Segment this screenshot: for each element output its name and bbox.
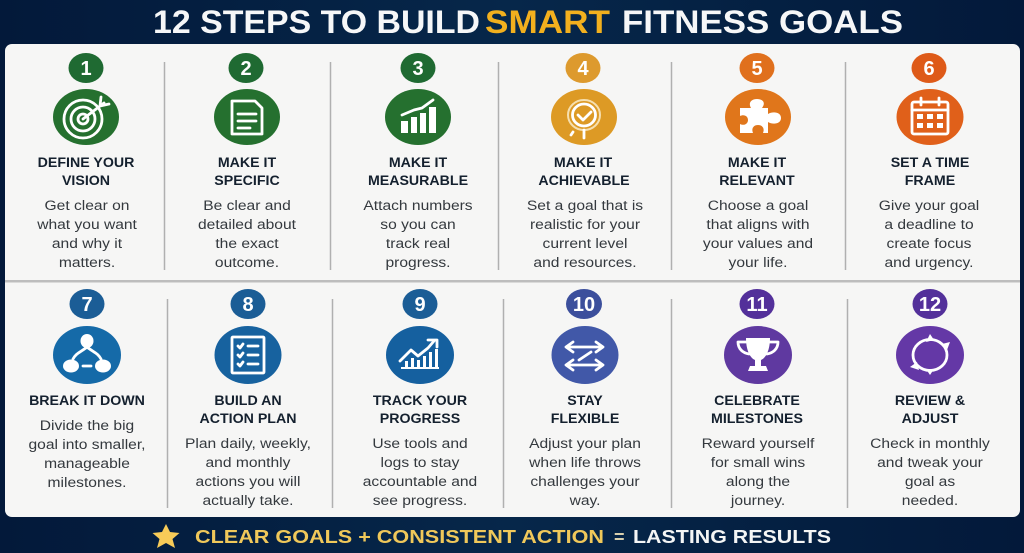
- title: SMART: [485, 4, 610, 40]
- icon: calendar: [896, 89, 964, 145]
- step 10: stay flexible: Adjust your plan: [529, 437, 641, 452]
- step 5: make it relevant: your life.: [729, 256, 787, 271]
- step 2: make it specific: detailed about: [198, 218, 296, 233]
- title: [153, 4, 903, 40]
- step 8: build an action plan: 8: [242, 294, 254, 316]
- step 9: track your progress: Use tools and: [372, 437, 468, 452]
- step 9: track your progress: 9: [414, 294, 426, 316]
- icon: star: [152, 524, 180, 548]
- icon: document: [214, 89, 280, 145]
- step 2: make it specific: outcome.: [215, 256, 279, 271]
- step 11: celebrate milestones: 11: [746, 294, 768, 316]
- step 1: define your vision: 1: [80, 58, 92, 80]
- step 4: make it achievable: realistic for your: [530, 218, 640, 233]
- step 1: define your vision: DEFINE YOUR: [38, 155, 134, 171]
- step 7: break it down: manageable: [44, 457, 130, 472]
- step 8: build an action plan: [185, 289, 311, 509]
- step 8: build an action plan: actually take.: [202, 494, 294, 509]
- icon: trophy: [724, 326, 792, 384]
- step 8: build an action plan: actions you will: [196, 475, 300, 490]
- step 8: build an action plan: BUILD AN: [214, 393, 282, 409]
- step 4: make it achievable: current level: [543, 237, 627, 252]
- step 6: set a time frame: create focus: [887, 237, 971, 252]
- step 3: make it measurable: track real: [386, 237, 450, 252]
- step 2: make it specific: 2: [240, 58, 252, 80]
- step 11: celebrate milestones: [702, 289, 815, 509]
- step 2: make it specific: Be clear and: [203, 199, 291, 214]
- step 4: make it achievable: and resources.: [533, 256, 637, 271]
- title: FITNESS GOALS: [622, 4, 903, 40]
- step 6: set a time frame: FRAME: [905, 173, 955, 189]
- icon: trend chart: [386, 326, 454, 384]
- step 8: build an action plan: and monthly: [205, 456, 291, 471]
- step 4: make it achievable: [527, 53, 643, 271]
- step 4: make it achievable: MAKE IT: [554, 155, 612, 171]
- step 7: break it down: Divide the big: [40, 419, 134, 434]
- step 10: stay flexible: way.: [569, 494, 601, 509]
- step 3: make it measurable: MEASURABLE: [368, 173, 468, 189]
- step 10: stay flexible: challenges your: [530, 475, 640, 490]
- icon: check badge: [551, 89, 617, 145]
- icon: target: [53, 89, 119, 145]
- step 1: define your vision: [36, 53, 137, 271]
- step 7: break it down: milestones.: [48, 476, 126, 491]
- icon: rising bars: [385, 89, 451, 145]
- step 2: make it specific: the exact: [215, 237, 279, 252]
- step 9: track your progress: [363, 289, 477, 509]
- step 1: define your vision: matters.: [59, 256, 115, 271]
- step 4: make it achievable: Set a goal that is: [527, 199, 643, 214]
- footer banner: =: [614, 527, 625, 547]
- step 7: break it down: [28, 289, 146, 491]
- step 11: celebrate milestones: along the: [726, 475, 790, 490]
- step 5: make it relevant: your values and: [703, 237, 813, 252]
- icon: review cycle: [896, 326, 964, 384]
- step 9: track your progress: TRACK YOUR: [373, 393, 467, 409]
- step 10: stay flexible: STAY: [567, 393, 603, 409]
- step 8: build an action plan: ACTION PLAN: [200, 411, 296, 427]
- step 10: stay flexible: FLEXIBLE: [551, 411, 619, 427]
- step 7: break it down: goal into smaller,: [28, 438, 146, 453]
- step 9: track your progress: see progress.: [373, 494, 467, 509]
- step 3: make it measurable: progress.: [385, 256, 451, 271]
- step 11: celebrate milestones: MILESTONES: [711, 411, 803, 427]
- step 12: review and adjust: ADJUST: [902, 411, 959, 427]
- step 8: build an action plan: Plan daily, weekly,: [185, 437, 311, 452]
- step 6: set a time frame: 6: [923, 58, 935, 80]
- step 12: review and adjust: 12: [919, 294, 941, 316]
- icon: puzzle piece: [725, 89, 791, 145]
- footer banner: [152, 524, 831, 548]
- step 4: make it achievable: ACHIEVABLE: [538, 173, 630, 189]
- step 2: make it specific: [198, 53, 296, 271]
- step 11: celebrate milestones: Reward yourself: [702, 437, 815, 452]
- step 11: celebrate milestones: for small wins: [711, 456, 805, 471]
- step 6: set a time frame: Give your goal: [879, 199, 979, 214]
- step 1: define your vision: and why it: [52, 237, 122, 252]
- icon: connected nodes: [53, 326, 121, 384]
- step 12: review and adjust: and tweak your: [877, 456, 983, 471]
- step 9: track your progress: PROGRESS: [380, 411, 460, 427]
- step 1: define your vision: what you want: [36, 218, 137, 233]
- step 12: review and adjust: goal as: [905, 475, 955, 490]
- step 2: make it specific: SPECIFIC: [214, 173, 280, 189]
- step 12: review and adjust: [870, 289, 990, 509]
- step 10: stay flexible: when life throws: [528, 456, 641, 471]
- step 6: set a time frame: SET A TIME: [891, 155, 969, 171]
- step 5: make it relevant: RELEVANT: [719, 173, 795, 189]
- step 9: track your progress: accountable and: [363, 475, 477, 490]
- step 11: celebrate milestones: journey.: [730, 494, 785, 509]
- title: 12 STEPS TO BUILD: [153, 4, 480, 40]
- step 3: make it measurable: 3: [412, 58, 424, 80]
- step 1: define your vision: Get clear on: [45, 199, 129, 214]
- step 4: make it achievable: 4: [577, 58, 589, 80]
- step 12: review and adjust: needed.: [902, 494, 958, 509]
- step 2: make it specific: MAKE IT: [218, 155, 276, 171]
- step 3: make it measurable: [363, 53, 473, 271]
- icon: checklist: [214, 326, 282, 384]
- step 7: break it down: BREAK IT DOWN: [29, 393, 145, 409]
- step 6: set a time frame: [879, 53, 979, 271]
- footer banner: CLEAR GOALS + CONSISTENT ACTION: [195, 527, 604, 547]
- step 5: make it relevant: Choose a goal: [708, 199, 808, 214]
- step 5: make it relevant: [703, 53, 813, 271]
- step 5: make it relevant: 5: [751, 58, 763, 80]
- step 11: celebrate milestones: CELEBRATE: [714, 393, 800, 409]
- step 1: define your vision: VISION: [62, 173, 110, 189]
- step 7: break it down: 7: [81, 294, 93, 316]
- step 6: set a time frame: a deadline to: [884, 218, 974, 233]
- step 6: set a time frame: and urgency.: [884, 256, 974, 271]
- step 9: track your progress: logs to stay: [381, 456, 460, 471]
- step 12: review and adjust: REVIEW &: [895, 393, 965, 409]
- step 5: make it relevant: that aligns with: [706, 218, 810, 233]
- step 5: make it relevant: MAKE IT: [728, 155, 786, 171]
- step 3: make it measurable: so you can: [380, 218, 456, 233]
- step 3: make it measurable: Attach numbers: [363, 199, 473, 214]
- step 10: stay flexible: [528, 289, 641, 509]
- step 3: make it measurable: MAKE IT: [389, 155, 447, 171]
- icon: swap arrows: [552, 326, 618, 384]
- footer banner: LASTING RESULTS: [633, 527, 831, 547]
- step 10: stay flexible: 10: [573, 294, 595, 316]
- step 12: review and adjust: Check in monthly: [870, 437, 990, 452]
